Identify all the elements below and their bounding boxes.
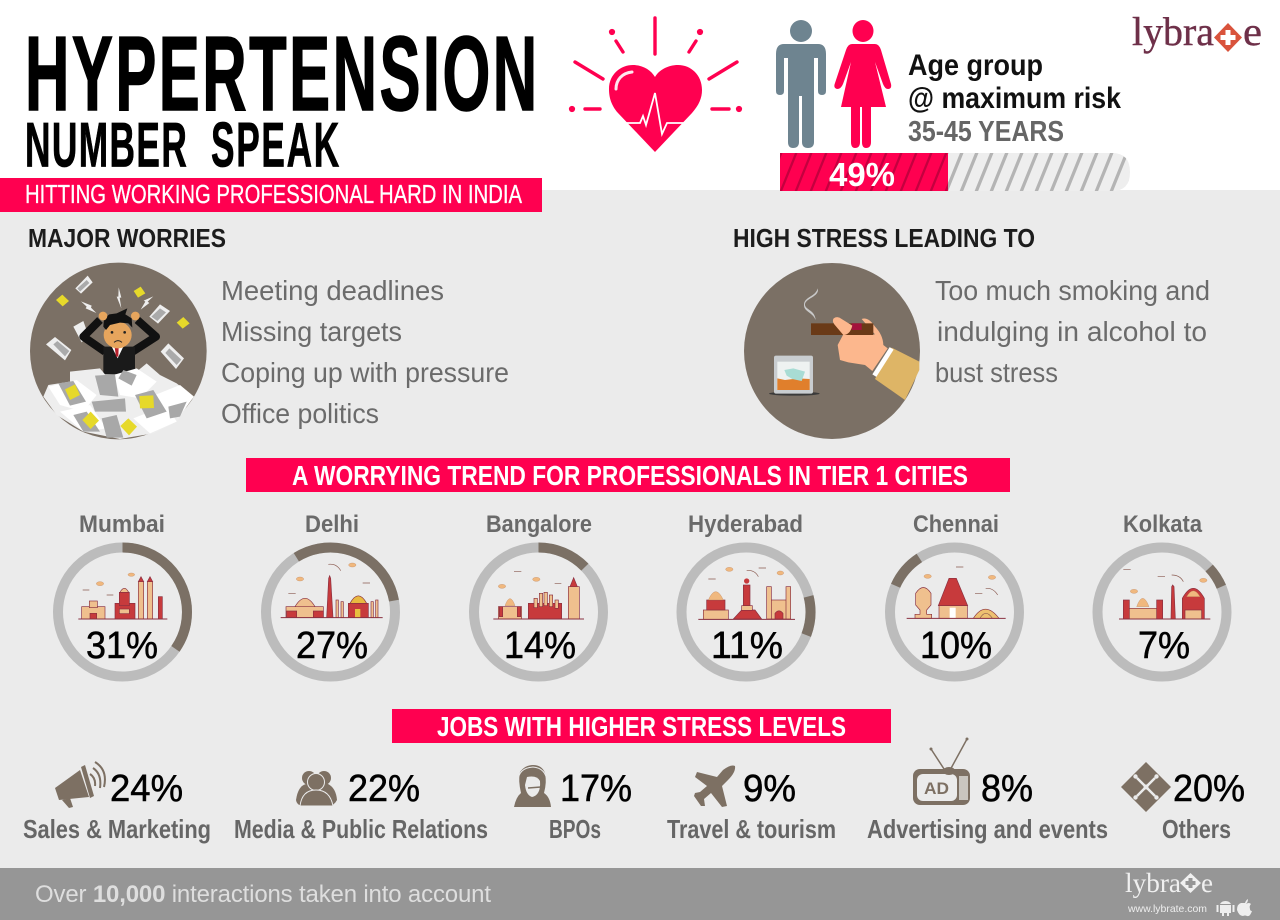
logo: lybrate top: e xyxy=(1243,9,1262,54)
job: others: 20% xyxy=(1173,768,1245,810)
age group text xyxy=(908,49,1121,148)
banner: jobs: JOBS WITH HIGHER STRESS LEVELS xyxy=(437,711,846,742)
icon: heart with pulse xyxy=(571,18,740,152)
city: Bangalore: 14% xyxy=(504,625,576,667)
city: Hyderabad: 11% xyxy=(711,625,783,667)
icon: megaphone xyxy=(55,762,105,808)
city: Delhi xyxy=(242,511,419,701)
job: advertising and events: 8% xyxy=(981,768,1033,810)
job: media and public relations: Media & Public Relations xyxy=(234,814,488,844)
worries list: Office politics xyxy=(221,398,379,429)
job: advertising and events: Advertising and events xyxy=(867,814,1108,844)
worries list xyxy=(221,275,509,429)
footer bar xyxy=(0,868,1280,920)
age group text: 35-45 YEARS xyxy=(908,116,1064,148)
subtitle: speak: SPEAK xyxy=(211,110,339,180)
illustration: stressed worker xyxy=(30,263,207,439)
job: media and public relations: 22% xyxy=(348,768,420,810)
job: travel and tourism xyxy=(667,766,836,844)
banner: hitting working professionals: HITTING WORKING PROFESSIONAL HARD IN INDIA xyxy=(25,179,523,209)
illustration: cigar and whisky xyxy=(744,263,920,439)
worries list: Missing targets xyxy=(221,316,402,347)
job: others: Others xyxy=(1162,814,1231,844)
city: Bangalore xyxy=(474,511,603,676)
progress bar 49% xyxy=(780,153,1130,193)
icon: tv with AD: AD xyxy=(924,779,949,798)
job: BPOs xyxy=(514,765,632,844)
job: BPOs: 17% xyxy=(560,768,632,810)
icon: headset operator xyxy=(514,765,551,807)
city: Mumbai xyxy=(58,511,187,676)
icon: people xyxy=(296,771,337,806)
logo: lybrate footer: www.lybrate.com xyxy=(1127,903,1207,915)
city: Delhi: 27% xyxy=(296,625,368,667)
logo: lybrate footer xyxy=(1125,868,1252,916)
job: media and public relations xyxy=(234,768,488,844)
age group text: @ maximum risk xyxy=(908,82,1121,115)
city: Chennai: 10% xyxy=(920,625,992,667)
worries list: Meeting deadlines xyxy=(221,275,444,306)
stress text xyxy=(935,275,1210,388)
stress text: Too much smoking and xyxy=(935,275,1210,306)
icon: man figure xyxy=(776,20,826,148)
job: others xyxy=(1121,762,1245,844)
title: HYPERTENSION xyxy=(25,16,537,133)
logo: lybrate footer: lybra xyxy=(1125,868,1181,898)
city: Hyderabad: Hyderabad xyxy=(688,511,803,538)
city: Chennai: Chennai xyxy=(913,511,999,538)
age group text: Age group xyxy=(908,49,1043,82)
logo: lybrate top: lybra xyxy=(1132,9,1214,54)
city: Kolkata xyxy=(1071,511,1253,703)
subtitle: number: NUMBER xyxy=(25,110,187,180)
job: advertising and events xyxy=(867,738,1108,844)
logo: lybrate footer: e xyxy=(1201,868,1213,898)
heading: major worries: MAJOR WORRIES xyxy=(28,223,226,253)
icon: puzzle diamond xyxy=(1121,762,1171,812)
job: sales and marketing: Sales & Marketing xyxy=(23,814,211,844)
city: Delhi: Delhi xyxy=(305,511,359,538)
icon: apple xyxy=(1237,899,1252,916)
icon: woman figure xyxy=(834,20,891,148)
city: Chennai xyxy=(869,511,1040,697)
logo: lybrate top xyxy=(1132,9,1262,54)
job: travel and tourism: Travel & tourism xyxy=(667,814,836,844)
job: BPOs: BPOs xyxy=(549,814,601,844)
job: sales and marketing: 24% xyxy=(110,768,183,810)
footer text: Over 10,000 interactions taken into account xyxy=(35,881,491,908)
city: Mumbai: Mumbai xyxy=(79,511,165,538)
heading: high stress: HIGH STRESS LEADING TO xyxy=(733,223,1035,253)
progress bar 49%: 49% xyxy=(829,156,895,193)
icon: android xyxy=(1216,901,1234,916)
worries list: Coping up with pressure xyxy=(221,357,509,388)
job: travel and tourism: 9% xyxy=(743,768,796,810)
city: Kolkata: 7% xyxy=(1138,625,1190,667)
job: sales and marketing xyxy=(23,762,211,844)
stress text: indulging in alcohol to xyxy=(937,316,1207,347)
city: Hyderabad xyxy=(668,511,824,690)
banner: tier 1 cities: A WORRYING TREND FOR PROFESSIONALS IN TIER 1 CITIES xyxy=(292,460,968,491)
city: Bangalore: Bangalore xyxy=(486,511,592,538)
icon: plane xyxy=(694,766,735,807)
city: Kolkata: Kolkata xyxy=(1123,511,1203,538)
city: Mumbai: 31% xyxy=(86,625,158,667)
icon: tv with AD xyxy=(913,738,970,805)
stress text: bust stress xyxy=(935,357,1058,388)
